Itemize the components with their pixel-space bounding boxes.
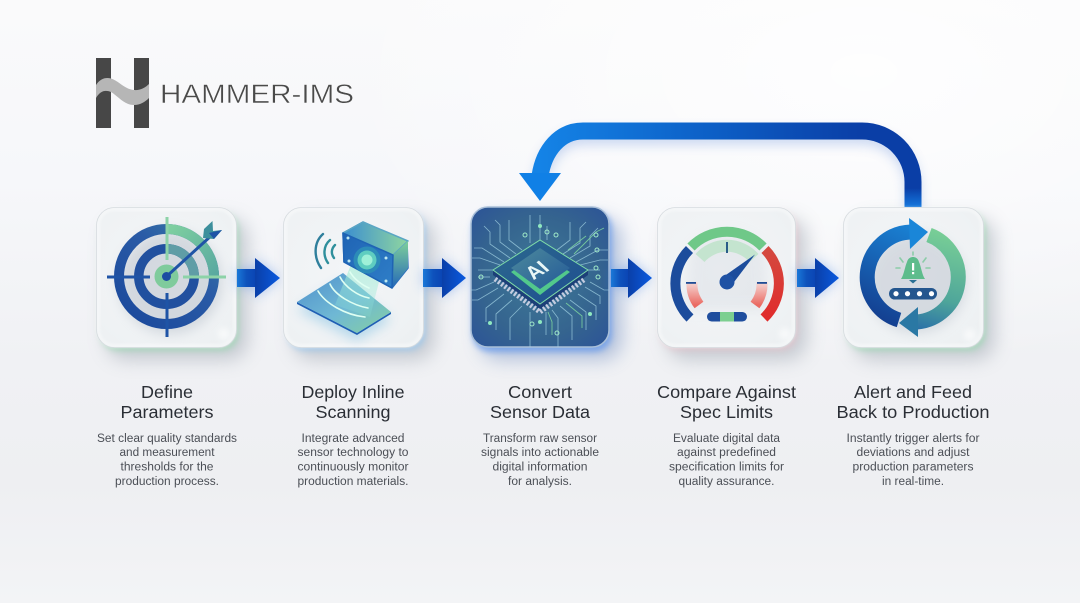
panel: scanner card <box>284 208 435 360</box>
description: Integrate advanced <box>302 433 404 445</box>
description <box>846 433 980 488</box>
description: continuously monitor <box>298 462 409 474</box>
step 3: convert sensor data <box>471 207 622 488</box>
heading: Scanning <box>316 402 390 422</box>
logo mark: H with wave <box>96 58 149 128</box>
panel: alert card <box>844 208 995 360</box>
heading <box>120 382 214 422</box>
step 1: define parameters <box>96 208 248 488</box>
description: deviations and adjust <box>856 447 970 459</box>
description: production process. <box>115 476 219 488</box>
heading: Spec Limits <box>680 402 773 422</box>
heading: Sensor Data <box>490 402 590 422</box>
heading: Parameters <box>120 402 214 422</box>
step 5: alert and feed back <box>836 208 995 488</box>
arrow: step 2 to 3 <box>423 258 466 298</box>
panel: AI chip card <box>471 207 622 360</box>
arrow: step 1 to 2 <box>237 258 280 298</box>
heading <box>302 382 404 422</box>
heading: Define <box>141 382 193 402</box>
description: for analysis. <box>508 476 572 488</box>
description <box>669 433 784 488</box>
description <box>97 433 237 488</box>
description: and measurement <box>120 447 215 459</box>
description: Instantly trigger alerts for <box>846 433 980 445</box>
heading <box>490 382 590 422</box>
icon: AI chip with circuit traces: AI <box>521 258 554 284</box>
logo: Hammer-IMS <box>96 58 354 128</box>
description <box>481 433 599 488</box>
step 2: deploy inline scanning <box>284 208 435 488</box>
description <box>298 433 409 488</box>
logo wordmark: HAMMER-IMS <box>160 79 354 109</box>
description: Evaluate digital data <box>673 433 781 445</box>
icon: cycle with bell and conveyor <box>866 218 966 337</box>
heading: Back to Production <box>836 402 990 422</box>
heading: Alert and Feed <box>854 382 972 402</box>
description: in real-time. <box>882 476 944 488</box>
arrow: step 3 to 4 <box>611 258 652 298</box>
return feedback arrow <box>519 131 922 211</box>
description: thresholds for the <box>120 462 214 474</box>
icon: AI chip with circuit traces <box>471 215 610 347</box>
icon: speed gauge <box>675 231 779 322</box>
panel: gauge card <box>658 208 807 360</box>
description: specification limits for <box>669 462 784 474</box>
heading: Deploy Inline <box>302 382 404 402</box>
heading <box>657 382 796 422</box>
description: against predefined <box>677 447 776 459</box>
heading: Compare Against <box>657 382 796 402</box>
arrow: step 4 to 5 <box>797 258 839 298</box>
description: production materials. <box>298 476 408 488</box>
description: quality assurance. <box>678 476 774 488</box>
heading: Convert <box>508 382 572 402</box>
description: digital information <box>492 462 588 474</box>
step 4: compare against spec limits <box>657 208 807 488</box>
icon: sensor scanning a sheet <box>297 222 408 341</box>
description: Set clear quality standards <box>97 433 237 445</box>
description: sensor technology to <box>298 447 408 459</box>
description: production parameters <box>852 462 974 474</box>
heading <box>836 382 990 422</box>
description: signals into actionable <box>481 447 599 459</box>
description: Transform raw sensor <box>483 433 597 445</box>
icon: target with arrow <box>107 217 226 337</box>
panel: target card <box>96 208 248 360</box>
